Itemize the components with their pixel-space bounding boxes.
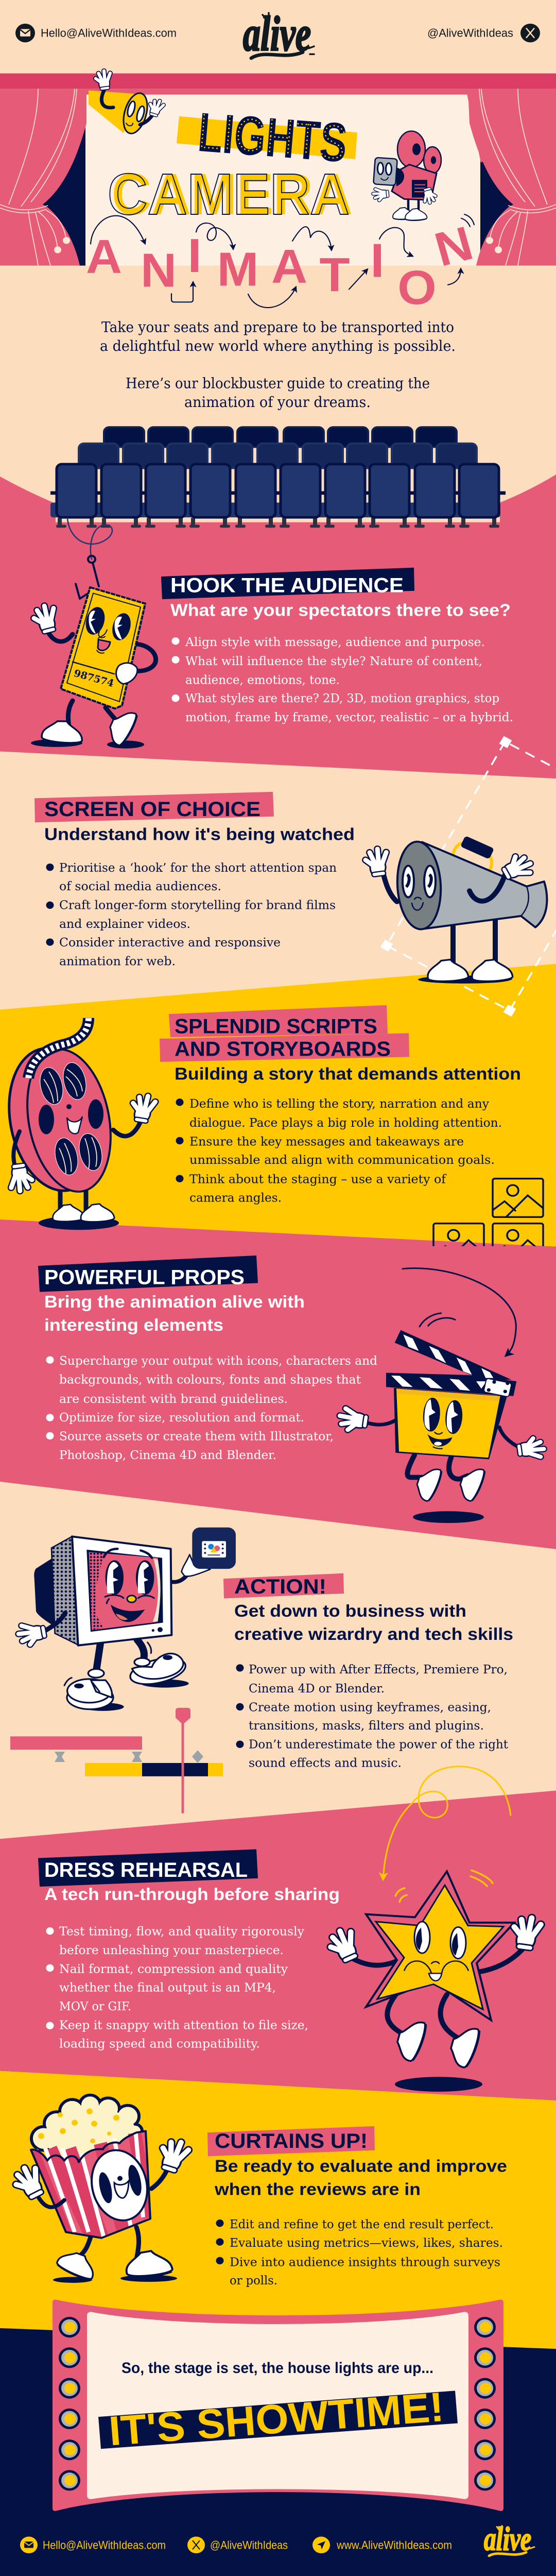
bullets: Ensure the key messages and takeaways are bbox=[189, 1134, 464, 1148]
timeline graphic bbox=[10, 1708, 223, 1814]
heading: SCREEN OF CHOICE bbox=[44, 798, 260, 821]
bullets: What will influence the style? Nature of content, bbox=[185, 654, 482, 668]
curtain: left bbox=[0, 89, 86, 265]
character: clapperboard bbox=[338, 1313, 545, 1523]
bullets: camera angles. bbox=[189, 1191, 282, 1205]
header contact bar: Hello@AliveWithIdeas.com bbox=[41, 27, 177, 40]
bullets bbox=[172, 635, 513, 724]
title: ANIMATION letters: O bbox=[397, 261, 437, 315]
panel: splendid scripts and storyboards bbox=[0, 1005, 543, 1262]
heading bbox=[223, 1573, 344, 1599]
bullets: Consider interactive and responsive bbox=[59, 936, 281, 950]
bullets bbox=[236, 1662, 508, 1770]
bullets: whether the final output is an MP4, bbox=[59, 1980, 276, 1995]
character: film camera bbox=[373, 131, 441, 221]
character: megaphone bbox=[364, 836, 547, 984]
bullets bbox=[216, 2217, 503, 2287]
title: CAMERA: CAMERA bbox=[108, 162, 350, 227]
bullets: sound effects and music. bbox=[249, 1756, 402, 1770]
bullets: motion, frame by frame, vector, realistic – or a hybrid. bbox=[185, 710, 513, 724]
heading bbox=[34, 792, 274, 822]
showtime banner: IT'S SHOWTIME! bbox=[107, 2384, 445, 2454]
intro text: Take your seats and prepare to be transported into bbox=[101, 319, 454, 335]
bullets: of social media audiences. bbox=[59, 879, 221, 893]
bullets: Power up with After Effects, Premiere Pro, bbox=[249, 1662, 508, 1676]
bullets bbox=[46, 1924, 308, 2051]
subheading bbox=[234, 1602, 513, 1644]
title: ANIMATION letters: N bbox=[141, 244, 177, 297]
heading: ACTION! bbox=[234, 1575, 326, 1598]
title: ANIMATION letters: I bbox=[371, 234, 384, 287]
logo: alive: alive bbox=[243, 7, 311, 61]
bullets: dialogue. Pace plays a big role in holding attention. bbox=[189, 1116, 502, 1130]
bullets: audience, emotions, tone. bbox=[185, 673, 340, 687]
bullets: or polls. bbox=[230, 2273, 277, 2287]
bullets: Optimize for size, resolution and format. bbox=[59, 1411, 304, 1425]
subheading: Understand how it's being watched bbox=[44, 825, 355, 844]
bullets: Nail format, compression and quality bbox=[59, 1962, 288, 1976]
bullets: Prioritise a ‘hook’ for the short attention span bbox=[59, 860, 337, 875]
subheading: creative wizardry and tech skills bbox=[234, 1625, 513, 1644]
panel: action bbox=[10, 1528, 513, 1814]
subheading: when the reviews are in bbox=[214, 2180, 421, 2199]
intro text bbox=[100, 319, 456, 411]
header contact bar bbox=[15, 24, 540, 42]
subheading: Building a story that demands attention bbox=[175, 1064, 521, 1083]
subheading: What are your spectators there to see? bbox=[170, 601, 511, 620]
bullets: are consistent with brand guidelines. bbox=[59, 1392, 288, 1406]
bullets: before unleashing your masterpiece. bbox=[59, 1943, 284, 1957]
bullets: Source assets or create them with Illustrator, bbox=[59, 1429, 334, 1443]
intro text: a delightful new world where anything is possible. bbox=[100, 338, 456, 354]
bullets: Cinema 4D or Blender. bbox=[249, 1682, 385, 1696]
bullets: animation for web. bbox=[59, 954, 176, 968]
character: ticket on hook: 987574 bbox=[73, 667, 115, 689]
subheading bbox=[44, 1293, 305, 1335]
heading: DRESS REHEARSAL bbox=[44, 1858, 248, 1882]
subheading bbox=[214, 2157, 507, 2199]
character: star bbox=[326, 1870, 542, 2092]
bullets: transitions, masks, filters and plugins. bbox=[249, 1718, 484, 1733]
heading: AND STORYBOARDS bbox=[175, 1037, 391, 1060]
panel: powerful props bbox=[38, 1256, 545, 1523]
panel: hook the audience bbox=[31, 518, 513, 749]
heading: CURTAINS UP! bbox=[215, 2129, 368, 2153]
bullets: Dive into audience insights through surveys bbox=[230, 2255, 500, 2269]
heading bbox=[160, 1005, 409, 1062]
bullets: loading speed and compatibility. bbox=[59, 2037, 260, 2051]
subheading: A tech run-through before sharing bbox=[44, 1885, 340, 1904]
heading: POWERFUL PROPS bbox=[44, 1265, 245, 1289]
bullets: Define who is telling the story, narration and any bbox=[189, 1096, 489, 1111]
intro text: animation of your dreams. bbox=[184, 394, 371, 411]
bullets bbox=[176, 1096, 502, 1205]
bullets: Think about the staging – use a variety of bbox=[189, 1172, 447, 1186]
title: ANIMATION letters: N bbox=[429, 216, 478, 277]
curtain: right bbox=[468, 89, 556, 265]
arrow: clapper swing bbox=[403, 1268, 516, 1356]
marquee text: So, the stage is set, the house lights are up... bbox=[121, 2360, 433, 2377]
dashed square decoration bbox=[380, 736, 556, 1016]
marquee sign bbox=[53, 2299, 503, 2511]
panel: dress rehearsal bbox=[38, 1767, 542, 2092]
title: LIGHTS: LIGHTS bbox=[196, 101, 350, 174]
bullets: What styles are there? 2D, 3D, motion graphics, stop bbox=[185, 691, 499, 705]
marquee lights bbox=[59, 2317, 496, 2491]
title: CAMERA: CAMERA bbox=[112, 162, 353, 227]
footer contacts: @AliveWithIdeas bbox=[210, 2539, 288, 2551]
subheading: Get down to business with bbox=[234, 1602, 466, 1621]
character: retro TV bbox=[17, 1528, 236, 1711]
heading: SPLENDID SCRIPTS bbox=[175, 1014, 377, 1038]
bullets: backgrounds, with colours, fonts and shapes that bbox=[59, 1372, 361, 1386]
icons: storyboard frames bbox=[432, 1178, 544, 1246]
bullets: Keep it snappy with attention to file size, bbox=[59, 2018, 308, 2032]
bullets: Align style with message, audience and purpose. bbox=[185, 635, 485, 649]
heading bbox=[38, 1256, 258, 1292]
bullets: Supercharge your output with icons, characters and bbox=[59, 1354, 377, 1368]
title: ANIMATION letters bbox=[86, 216, 478, 315]
bullets bbox=[46, 1354, 377, 1462]
bullets: Evaluate using metrics—views, likes, shares. bbox=[230, 2236, 503, 2250]
heading: HOOK THE AUDIENCE bbox=[170, 573, 404, 597]
panel: screen of choice bbox=[34, 792, 547, 984]
subheading: interesting elements bbox=[44, 1316, 223, 1335]
heading bbox=[161, 568, 414, 599]
character: popcorn bbox=[11, 2095, 190, 2283]
character: ticket on hook bbox=[31, 518, 156, 749]
panel: curtains up bbox=[11, 2095, 507, 2287]
title: LIGHTS bbox=[177, 101, 357, 174]
title: ANIMATION letters: I bbox=[188, 229, 201, 282]
bullets: Craft longer-form storytelling for brand films bbox=[59, 898, 336, 912]
arrow: star loop bbox=[383, 1767, 511, 1880]
bullets: and explainer videos. bbox=[59, 917, 190, 931]
header contact bar: @AliveWithIdeas bbox=[427, 27, 513, 40]
title: ANIMATION letters: A bbox=[271, 240, 307, 293]
character: spotlight bbox=[89, 70, 164, 136]
bullets: Test timing, flow, and quality rigorously bbox=[59, 1924, 304, 1939]
bullets bbox=[46, 860, 337, 968]
subheading: Be ready to evaluate and improve bbox=[215, 2157, 507, 2176]
stage with curtains bbox=[0, 74, 556, 265]
subheading: Bring the animation alive with bbox=[44, 1293, 305, 1312]
intro text: Here’s our blockbuster guide to creating the bbox=[126, 375, 430, 392]
footer contacts bbox=[20, 2536, 452, 2553]
heading bbox=[38, 1849, 258, 1887]
bullets: Don’t underestimate the power of the right bbox=[249, 1737, 508, 1751]
cinema seats bbox=[50, 427, 506, 528]
bullets: Edit and refine to get the end result perfect. bbox=[230, 2217, 494, 2231]
motion arrows bbox=[91, 214, 474, 308]
footer contacts: www.AliveWithIdeas.com bbox=[336, 2539, 452, 2551]
bullets: unmissable and align with communication goals. bbox=[189, 1153, 495, 1167]
footer contacts: Hello@AliveWithIdeas.com bbox=[43, 2539, 166, 2551]
bullets: Create motion using keyframes, easing, bbox=[249, 1700, 491, 1714]
footer logo: alive bbox=[484, 2521, 531, 2557]
character: film reel bbox=[0, 1018, 156, 1230]
title: ANIMATION letters: A bbox=[86, 230, 122, 283]
title: ANIMATION letters: M bbox=[217, 243, 258, 296]
bullets: Photoshop, Cinema 4D and Blender. bbox=[59, 1448, 276, 1462]
title: ANIMATION letters: T bbox=[319, 248, 350, 302]
bullets: MOV or GIF. bbox=[59, 1999, 131, 2013]
